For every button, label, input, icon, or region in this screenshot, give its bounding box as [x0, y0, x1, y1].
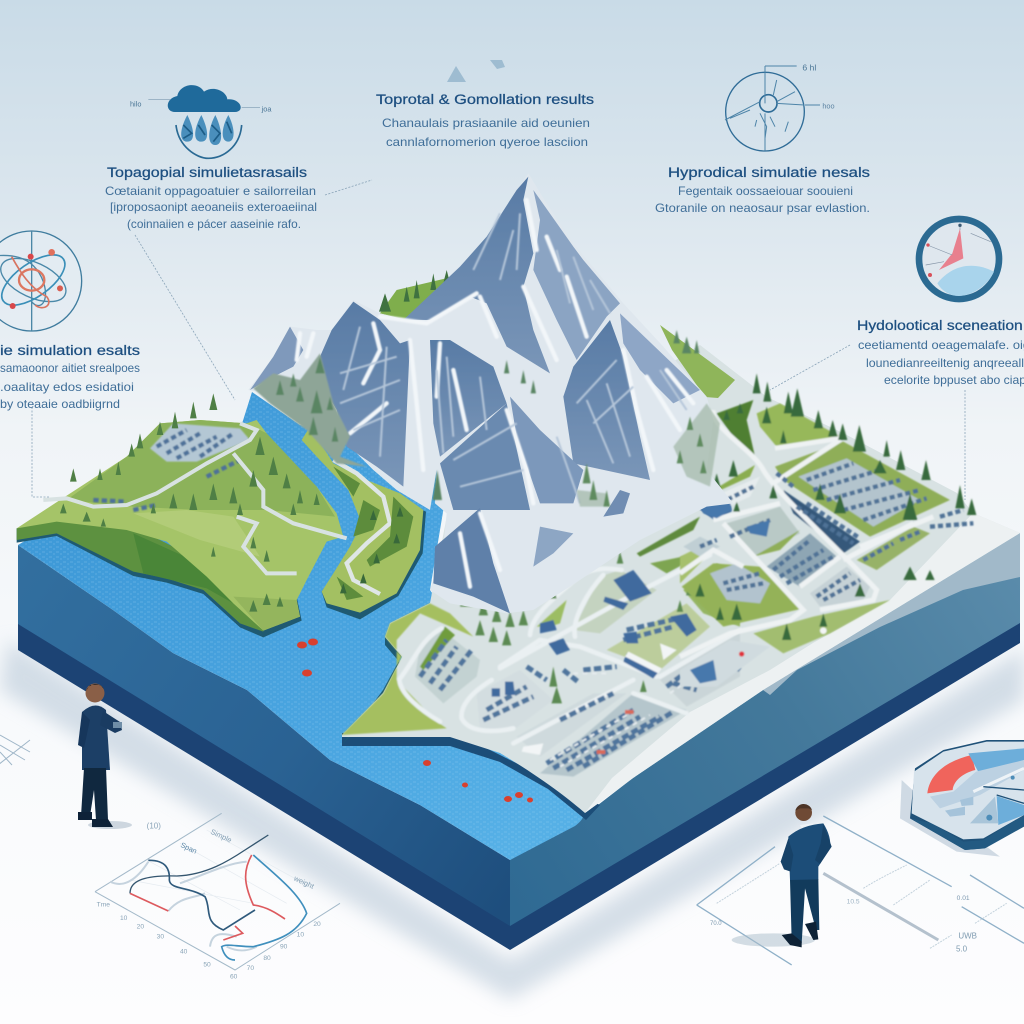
chart: floor charts behind man — [697, 816, 1024, 965]
district trees — [695, 373, 976, 640]
right side face — [510, 533, 1020, 926]
chart: left line chart on floor — [95, 813, 340, 980]
chart labels — [97, 821, 321, 980]
left headland — [17, 393, 347, 637]
mountain white streaks — [297, 200, 693, 587]
text: top centre block — [376, 92, 594, 149]
headland roads — [43, 423, 347, 573]
chart labels: 70 — [247, 965, 254, 972]
chart labels: 80 — [263, 955, 271, 962]
district buildings — [700, 463, 973, 600]
chart labels: 30 — [157, 933, 164, 940]
text: far right block: ceetiamentd oeagemalafe. oig — [858, 338, 1024, 352]
large building — [690, 502, 770, 683]
icon: mountain triangles — [447, 60, 505, 82]
peninsula trees — [333, 467, 413, 600]
headland top — [17, 420, 343, 631]
chart: floor charts behind man: UWB — [958, 931, 977, 940]
chart blue curve — [222, 855, 307, 960]
chart: floor charts behind man: 70.0 — [710, 921, 722, 927]
peninsula road — [333, 460, 390, 594]
text: left block — [0, 343, 140, 411]
leader lines — [32, 180, 965, 500]
chart: floor charts behind man: 10.5 — [847, 898, 860, 905]
icon: dial gauge — [919, 219, 999, 299]
chart labels: 10 — [120, 915, 128, 922]
water surface — [18, 392, 584, 860]
chart labels: 20 — [137, 923, 144, 930]
chart labels: 90 — [280, 943, 288, 950]
chart labels: (10) — [147, 821, 161, 830]
plain surface — [342, 345, 1020, 813]
mountain shaded facets — [250, 177, 700, 613]
chart labels: 50 — [203, 962, 211, 969]
diagram labels — [802, 63, 835, 111]
trees on plain — [460, 552, 727, 703]
coast shadow — [342, 730, 600, 820]
mountain base — [248, 173, 733, 613]
chart: floor charts behind man: 5.0 — [956, 945, 968, 954]
left side face — [18, 545, 510, 926]
cloud labels: joa — [261, 104, 272, 113]
chart labels: weight — [292, 873, 315, 891]
headland trees — [60, 393, 320, 612]
text: top left block: (coinnaiien e pácer aaseinie rafo. — [127, 217, 301, 231]
icon: radial diagram — [725, 63, 835, 151]
district roads — [680, 410, 933, 657]
text: top right block: Fegentaik oossaeiouar soouieni — [678, 184, 853, 198]
chart labels: 20 — [313, 921, 321, 928]
city roads — [399, 555, 740, 743]
person: left analyst — [78, 684, 132, 829]
headland houses — [93, 423, 250, 510]
diagram labels: hoo — [822, 102, 835, 111]
terrain diorama block — [17, 173, 1020, 950]
gauge shadow — [900, 780, 1000, 857]
chart light curves — [110, 862, 257, 951]
text: far right block: Hydolootical sceneation s — [857, 318, 1024, 333]
red buoys — [297, 638, 533, 802]
text: left block: by oteaaie oadbiigrnd — [0, 397, 120, 411]
red marker — [739, 651, 744, 657]
chart dark curve — [148, 860, 255, 930]
chart red curves — [130, 855, 285, 940]
shadow under diorama — [0, 640, 1024, 1000]
text: top centre block: cannlafornomerion qyeroe lasciion — [386, 135, 588, 149]
chart labels: 10 — [297, 932, 304, 939]
person: right analyst — [732, 804, 832, 947]
text: left block: samaoonor aitiet srealpoes — [0, 361, 140, 375]
buildings large — [492, 495, 732, 697]
gauge dial plate — [910, 740, 1024, 850]
mountain massif — [248, 173, 733, 613]
mountain foot forest — [253, 330, 720, 507]
main land: city plain — [342, 325, 1020, 820]
diagram labels: 6 hl — [802, 63, 816, 73]
chart labels: Span — [179, 840, 198, 856]
chart: floor charts behind man: 0.01 — [957, 895, 970, 902]
left edge mini chart — [0, 735, 30, 765]
building roofs light — [522, 497, 730, 755]
text: left block: .oaalitay edos esidatioi — [0, 380, 134, 394]
right floor elements — [697, 740, 1024, 965]
text: far right block: lounedianreeiltenig anqreeall — [866, 356, 1024, 370]
upper right green strip at ridge — [660, 325, 735, 398]
central peninsula — [302, 427, 426, 619]
text: far right block — [857, 318, 1024, 387]
chart labels: Tme — [97, 902, 110, 909]
text: top left block — [105, 165, 317, 231]
text: top centre block: Toprotal & Gomollation results — [376, 92, 594, 107]
base plinth — [18, 622, 1020, 950]
city detail — [342, 495, 740, 777]
mountain thin streaks — [340, 213, 687, 503]
text: top right block — [655, 165, 870, 215]
headland cliff — [17, 520, 302, 637]
green districts — [717, 400, 755, 457]
text: left block: ie simulation esalts — [0, 343, 140, 358]
chart labels: 60 — [230, 973, 238, 980]
back hill — [379, 270, 453, 320]
text: top right block: Hyprodical simulatie nesals — [668, 165, 870, 180]
chart axes — [95, 813, 340, 970]
building rows — [420, 617, 740, 770]
tip green — [342, 603, 473, 735]
peninsula top — [302, 427, 423, 613]
front peak facet — [433, 508, 510, 613]
front strip — [585, 513, 1020, 813]
city block bases — [415, 628, 480, 703]
icon: rain cloud — [130, 85, 272, 158]
text: top left block: [iproposaonipt aeoaneiis exteroaeiinal — [110, 200, 317, 214]
icon: atom circle — [0, 231, 82, 331]
chart labels: Simple — [209, 827, 233, 845]
text: top left block: Cœtaianit oppagoatuier e sailorreilan — [105, 184, 316, 198]
cloud labels — [130, 100, 272, 113]
red roofs — [597, 710, 634, 754]
upper right district — [680, 373, 976, 687]
cloud labels: hilo — [130, 100, 141, 109]
text: top right block: Gtoranile on neaosaur psar evlastion. — [655, 201, 870, 215]
text: far right block: ecelorite bppuset abo ciap — [884, 373, 1024, 387]
chart labels: 40 — [180, 948, 188, 955]
text: top centre block: Chanaulais prasiaanile aid oeunien — [382, 116, 590, 130]
land flank at inlet — [342, 637, 402, 745]
text: top left block: Topagopial simulietasrasails — [107, 165, 307, 180]
